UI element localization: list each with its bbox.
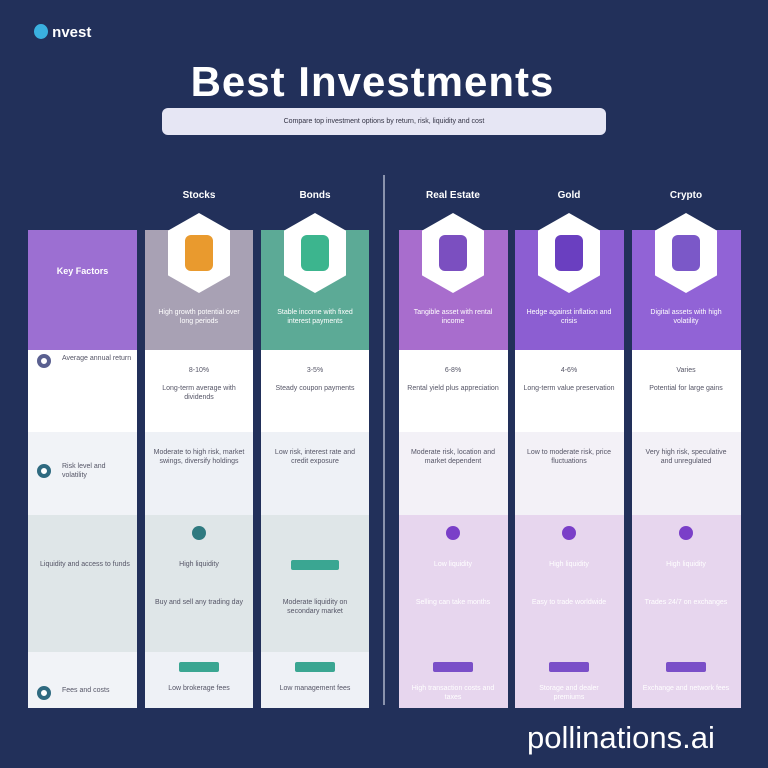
panel: Crypto	[632, 230, 741, 708]
panel: Stocks: 8-10%	[189, 367, 209, 374]
panel: Gold: Storage and dealer premiums	[539, 685, 599, 701]
column titles: Real Estate	[426, 190, 480, 201]
divider	[383, 175, 385, 705]
panel: Crypto: Trades 24/7 on exchanges	[645, 599, 727, 606]
logo: nvest	[52, 24, 91, 41]
panel: Bonds: Steady coupon payments	[276, 385, 354, 392]
panel: Stocks: High liquidity	[179, 561, 219, 568]
logo	[34, 24, 92, 41]
panel: Gold	[515, 230, 624, 708]
panel: Bonds: 3-5%	[307, 367, 323, 374]
panel: Stocks: Long-term average with dividends	[162, 385, 236, 401]
panel: Crypto: High liquidity	[666, 561, 706, 568]
column titles: Stocks	[183, 190, 215, 201]
panel: Real Estate: Low liquidity	[434, 561, 472, 568]
panel: Real Estate: Tangible asset with rental income	[414, 309, 492, 325]
panel: Crypto: Exchange and network fees	[643, 685, 729, 692]
subtitle banner: Compare top investment options by return, risk, liquidity and cost	[284, 118, 484, 125]
panel: Gold: Easy to trade worldwide	[532, 599, 606, 606]
panel: Real Estate: Moderate risk, location and market dependent	[411, 449, 495, 465]
panel: Real Estate: 6-8%	[445, 367, 461, 374]
panel: label column	[28, 230, 137, 708]
column titles: Bonds	[299, 190, 331, 201]
title: Best Investments	[191, 58, 554, 105]
panel: label column: Liquidity and access to funds	[40, 561, 130, 568]
panel: Bonds: Stable income with fixed interest payments	[277, 309, 353, 325]
panel: Stocks: Buy and sell any trading day	[155, 599, 243, 606]
panel: Stocks: High growth potential over long periods	[158, 309, 240, 325]
column titles: Gold	[558, 190, 580, 201]
panel: Stocks: Low brokerage fees	[168, 685, 230, 692]
watermark: pollinations.ai	[527, 720, 715, 755]
panel: Bonds	[261, 230, 369, 708]
panel: Bonds: Low risk, interest rate and credit exposure	[275, 449, 355, 465]
panel: Bonds: Moderate liquidity on secondary market	[283, 599, 347, 615]
panel: Real Estate: Selling can take months	[416, 599, 490, 606]
panel: Gold: Low to moderate risk, price fluctuations	[527, 449, 611, 465]
panel: Stocks: Moderate to high risk, market swings, diversify holdings	[154, 449, 244, 465]
panel: label column: Risk level and volatility	[62, 463, 106, 479]
panel: label column: Average annual return	[62, 355, 131, 362]
panel: Gold: Hedge against inflation and crisis	[527, 309, 611, 325]
panel: Real Estate: Rental yield plus appreciation	[407, 385, 499, 392]
panel: Gold: 4-6%	[561, 367, 577, 374]
panel: Crypto: Potential for large gains	[649, 385, 723, 392]
panel: Gold: Long-term value preservation	[523, 385, 615, 392]
panel: Crypto: Digital assets with high volatility	[650, 309, 722, 325]
panel: Bonds: Low management fees	[280, 685, 350, 692]
panel: label column: Key Factors	[57, 266, 108, 276]
panel: Gold: High liquidity	[549, 561, 589, 568]
panel: Real Estate	[399, 230, 508, 708]
column titles: Crypto	[670, 190, 702, 201]
panel: Crypto: Very high risk, speculative and unregulated	[646, 449, 726, 465]
column titles	[182, 190, 702, 201]
panel: Stocks	[145, 230, 253, 708]
panel: Real Estate: High transaction costs and taxes	[412, 685, 494, 701]
panel: label column: Fees and costs	[62, 687, 109, 694]
subtitle banner	[162, 108, 606, 135]
panel: Crypto: Varies	[676, 367, 696, 374]
